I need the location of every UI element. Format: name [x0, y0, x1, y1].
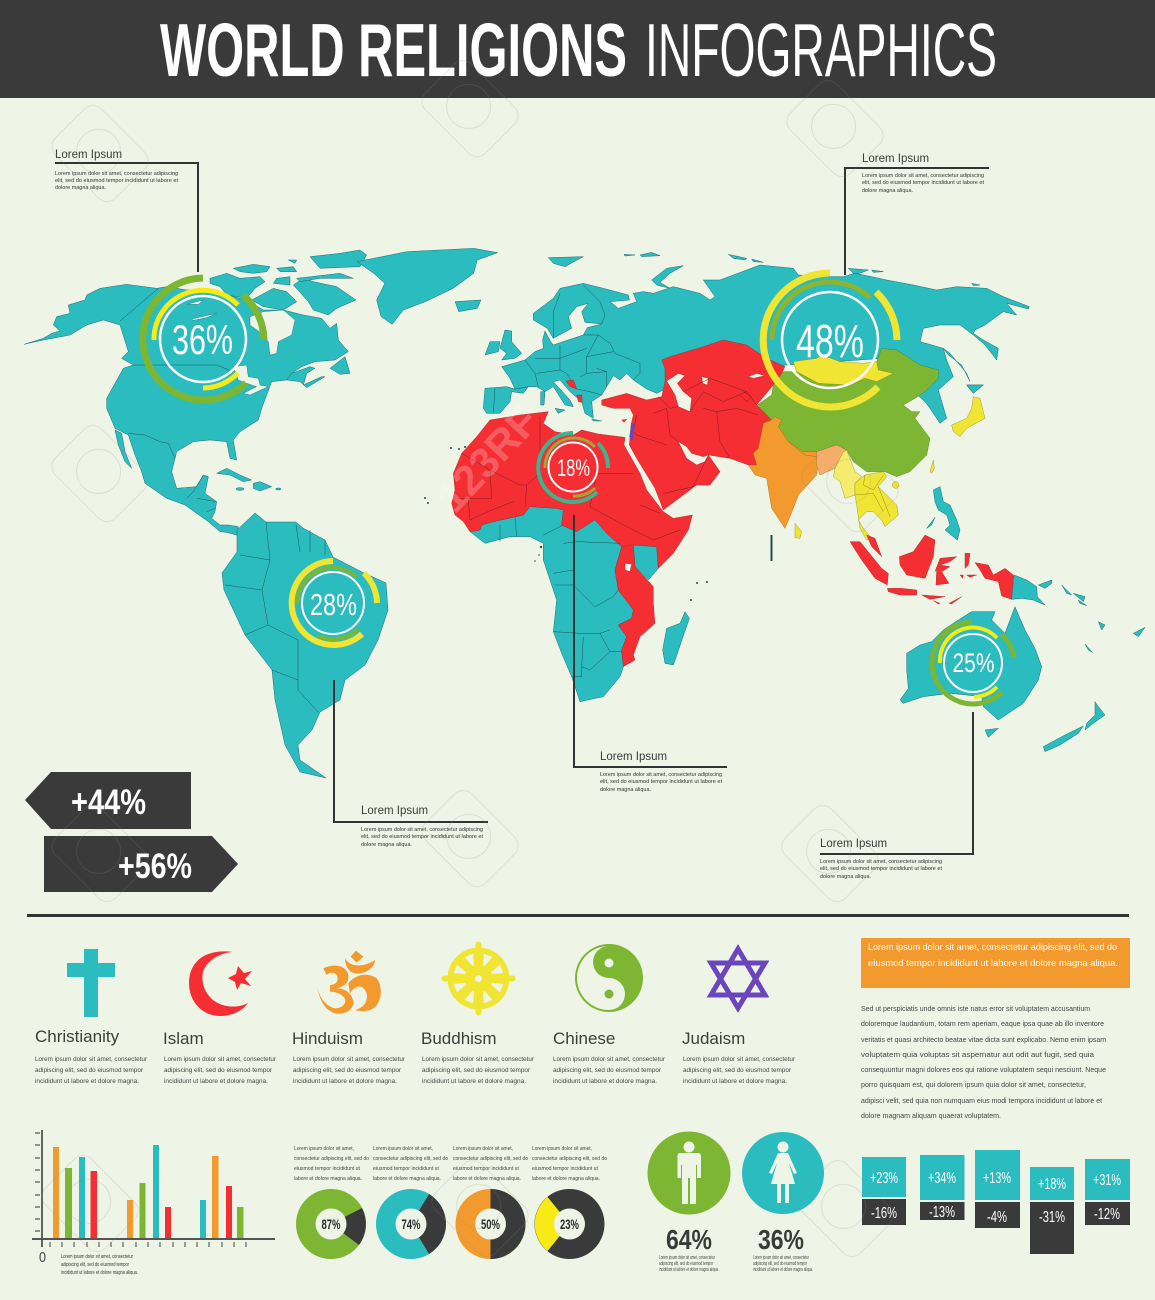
religion: christianity: adipiscing elit, sed do eiusmod tempor	[35, 1067, 144, 1074]
religion: buddhism: Lorem ipsum dolor sit amet, consectetur	[422, 1056, 535, 1063]
religion: judaism: adipiscing elit, sed do eiusmod tempor	[683, 1067, 792, 1074]
religion: christianity: Lorem ipsum dolor sit amet, consectetur	[35, 1056, 148, 1063]
donut chart 50 percent: Lorem ipsum dolor sit amet,	[453, 1146, 513, 1152]
donut chart 23 percent: consectetur adipiscing elit, sed do	[532, 1156, 607, 1162]
religion: islam: adipiscing elit, sed do eiusmod tempor	[164, 1067, 273, 1074]
donut chart 50 percent: 50%	[481, 1216, 500, 1232]
mongolia	[793, 355, 893, 385]
religion: chinese: incididunt ut labore et dolore magna.	[553, 1078, 657, 1085]
female statistic: Lorem ipsum dolor sit amet, consectetur	[753, 1255, 809, 1261]
religion: chinese: Chinese	[553, 1029, 615, 1048]
male statistic	[648, 1132, 730, 1273]
callout: top left: Lorem Ipsum	[55, 149, 122, 161]
religion: judaism: Judaism	[682, 1029, 745, 1048]
icon: man	[678, 1142, 701, 1204]
religion: islam: Islam	[163, 1029, 204, 1048]
callout: top right: dolore magna aliqua.	[862, 188, 913, 194]
donut chart 50 percent	[453, 1146, 528, 1259]
donut chart 50 percent: labore et dolore magna aliqua.	[453, 1176, 521, 1182]
donut chart 23 percent	[532, 1146, 607, 1259]
africa	[452, 412, 692, 702]
up down column 4: -31%	[1039, 1209, 1065, 1226]
female statistic	[742, 1132, 824, 1273]
up down column 2: -13%	[929, 1204, 955, 1221]
religion: judaism	[682, 949, 796, 1085]
arrow: plus 56 percent	[44, 836, 238, 892]
male statistic: 64%	[666, 1224, 712, 1255]
body paragraph: voluptatem quia voluptas sit aspernatur aut odit aut fugit, sed quia	[861, 1050, 1094, 1059]
south america	[222, 513, 388, 778]
body paragraph	[861, 1004, 1106, 1120]
up down column 1	[862, 1157, 906, 1225]
header banner	[0, 0, 1155, 98]
donut callout 36 percent	[143, 278, 264, 400]
male statistic: adipiscing elit, sed do eiusmod tempor	[659, 1261, 713, 1267]
donut chart 74 percent: eiusmod tempor incididunt ut	[373, 1166, 440, 1172]
religion: chinese: Lorem ipsum dolor sit amet, consectetur	[553, 1056, 666, 1063]
body paragraph: porro quisquam est, qui dolorem ipsum quia dolor sit amet, consectetur,	[861, 1080, 1086, 1089]
icon: dharma wheel	[444, 944, 512, 1012]
callout: south america	[334, 680, 488, 848]
donut chart 74 percent: Lorem ipsum dolor sit amet,	[373, 1146, 433, 1152]
callout: top left: Lorem ipsum dolor sit amet, consectetur adipiscing	[55, 171, 178, 177]
up down column 5: +31%	[1093, 1172, 1121, 1189]
religion: hinduism	[292, 951, 406, 1085]
eurasia and british isles	[483, 252, 1029, 510]
callout: top left: dolore magna aliqua.	[55, 185, 106, 191]
donut chart 87 percent	[294, 1146, 369, 1259]
female statistic: 36%	[758, 1224, 804, 1255]
body paragraph: adipisci velit, sed quia non numquam eius modi tempora incididunt ut labore et	[861, 1096, 1102, 1105]
arrow: plus 44 percent	[25, 772, 191, 829]
male statistic: incididunt ut labore et dolore magna aliqua.	[659, 1267, 719, 1273]
callout: south america: elit, sed do eiusmod tempor incididunt ut labore et	[361, 834, 483, 840]
india	[748, 417, 818, 528]
religion: buddhism: incididunt ut labore et dolore magna.	[422, 1078, 526, 1085]
orange text banner	[861, 938, 1130, 988]
donut chart 87 percent: labore et dolore magna aliqua.	[294, 1176, 362, 1182]
donut chart 74 percent	[373, 1146, 448, 1259]
icon: woman	[769, 1142, 797, 1203]
up down column 3	[975, 1150, 1020, 1228]
donut chart 23 percent: Lorem ipsum dolor sit amet,	[532, 1146, 592, 1152]
up down column 1: -16%	[871, 1205, 897, 1222]
callout: top right: Lorem Ipsum	[862, 153, 929, 165]
religion: buddhism	[421, 944, 535, 1085]
callout: south america: Lorem Ipsum	[361, 805, 428, 817]
donut chart 23 percent: labore et dolore magna aliqua.	[532, 1176, 600, 1182]
female statistic: adipiscing elit, sed do eiusmod tempor	[753, 1261, 807, 1267]
up down column 2: +34%	[928, 1170, 956, 1187]
body paragraph: doloremque laudantium, totam rem aperiam, eaque ipsa quae ab illo inventore	[861, 1019, 1104, 1028]
greenland and iceland	[357, 248, 498, 324]
callout: africa: Lorem ipsum dolor sit amet, consectetur adipiscing	[600, 772, 722, 778]
orange text banner: eiusmod tempor incididunt ut labore et dolore magna aliqua.	[868, 958, 1118, 968]
up down column 4: +18%	[1038, 1176, 1066, 1193]
up down column 4	[1030, 1167, 1074, 1254]
world map	[24, 248, 1145, 778]
donut chart 74 percent: consectetur adipiscing elit, sed do	[373, 1156, 448, 1162]
up down column 2	[920, 1155, 964, 1221]
callout: top left	[55, 149, 198, 272]
callout: australia: Lorem Ipsum	[820, 838, 887, 850]
up down column 5	[1085, 1159, 1130, 1225]
donut chart 50 percent: consectetur adipiscing elit, sed do	[453, 1156, 528, 1162]
callout: australia: elit, sed do eiusmod tempor incididunt ut labore et	[820, 866, 942, 872]
religion: judaism: incididunt ut labore et dolore magna.	[683, 1078, 787, 1085]
donut chart 87 percent: eiusmod tempor incididunt ut	[294, 1166, 361, 1172]
religion: chinese	[553, 944, 666, 1085]
callout: top right: Lorem ipsum dolor sit amet, consectetur adipiscing	[862, 173, 984, 179]
donut callout 48 percent: 48%	[796, 315, 864, 367]
up down column 3: -4%	[987, 1209, 1007, 1226]
orange text banner: Lorem ipsum dolor sit amet, consectetur adipiscing elit, sed do	[868, 942, 1117, 952]
callout: top right	[845, 153, 989, 275]
donut chart 87 percent: 87%	[322, 1216, 341, 1232]
donut chart 87 percent: consectetur adipiscing elit, sed do	[294, 1156, 369, 1162]
callout: top left: elit, sed do eiusmod tempor incididunt ut labore et	[55, 178, 178, 184]
callout: africa	[574, 515, 727, 793]
donut chart 23 percent: eiusmod tempor incididunt ut	[532, 1166, 599, 1172]
callout: australia: dolore magna aliqua.	[820, 874, 871, 880]
donut chart 74 percent: 74%	[402, 1216, 421, 1232]
donut callout 36 percent: 36%	[172, 316, 233, 363]
icon: cross	[67, 949, 115, 1017]
body paragraph: veritatis et quasi architecto beatae vitae dicta sunt explicabo. Nemo enim ipsam	[861, 1035, 1106, 1044]
religion: buddhism: adipiscing elit, sed do eiusmod tempor	[422, 1067, 531, 1074]
body paragraph: dolore magnam aliquam quaerat voluptatem.	[861, 1111, 1001, 1120]
up down column 3: +13%	[983, 1170, 1011, 1187]
callout: south america: dolore magna aliqua.	[361, 842, 412, 848]
religion: hinduism: Lorem ipsum dolor sit amet, consectetur	[293, 1056, 406, 1063]
donut callout 25 percent	[932, 622, 1014, 704]
religion: hinduism: incididunt ut labore et dolore magna.	[293, 1078, 397, 1085]
text: 123RF	[427, 397, 548, 521]
donut callout 25 percent: 25%	[952, 648, 994, 678]
donut chart 87 percent: Lorem ipsum dolor sit amet,	[294, 1146, 354, 1152]
donut callout 18 percent: 18%	[557, 455, 590, 482]
icon: yin yang	[575, 944, 643, 1012]
callout: australia: Lorem ipsum dolor sit amet, consectetur adipiscing	[820, 859, 942, 865]
religion: christianity: incididunt ut labore et dolore magna.	[35, 1078, 139, 1085]
callout: south america: Lorem ipsum dolor sit amet, consectetur adipiscing	[361, 827, 483, 833]
callout: africa: Lorem Ipsum	[600, 751, 667, 763]
north america	[24, 250, 367, 535]
indonesia, oceania and australia	[850, 487, 1145, 752]
donut chart 50 percent: eiusmod tempor incididunt ut	[453, 1166, 520, 1172]
arrow: plus 56 percent: +56%	[118, 847, 192, 886]
bar chart	[32, 1130, 275, 1276]
religion: hinduism: adipiscing elit, sed do eiusmod tempor	[293, 1067, 402, 1074]
male statistic: Lorem ipsum dolor sit amet, consectetur	[659, 1255, 715, 1261]
religion: hinduism: Hinduism	[292, 1029, 363, 1048]
south and east asia	[748, 348, 985, 540]
bar chart: Lorem ipsum dolor sit amet, consectetur	[61, 1254, 133, 1260]
bar chart: 0	[39, 1249, 46, 1266]
religion: judaism: Lorem ipsum dolor sit amet, consectetur	[683, 1056, 796, 1063]
donut callout 28 percent: 28%	[310, 587, 357, 622]
religion: christianity	[35, 949, 148, 1085]
icon: om	[317, 951, 381, 1014]
callout: top right: elit, sed do eiusmod tempor incididunt ut labore et	[862, 180, 984, 186]
icon: star of david	[711, 949, 765, 1008]
header banner: WORLD RELIGIONS	[160, 8, 627, 92]
religion: islam: Lorem ipsum dolor sit amet, consectetur	[164, 1056, 277, 1063]
body paragraph: Sed ut perspiciatis unde omnis iste natus error sit voluptatem accusantium	[861, 1004, 1090, 1013]
donut chart 23 percent: 23%	[560, 1216, 579, 1232]
callout: africa: elit, sed do eiusmod tempor incididunt ut labore et	[600, 779, 722, 785]
icon: crescent and star	[189, 951, 252, 1016]
middle east and central asia	[602, 340, 785, 510]
callout: australia	[820, 712, 973, 880]
donut callout 48 percent	[763, 273, 897, 407]
up down column 5: -12%	[1094, 1206, 1120, 1223]
bar chart: incididunt ut labore et dolore magna aliqua.	[61, 1270, 138, 1276]
donut callout 28 percent	[292, 561, 377, 645]
religion: islam: incididunt ut labore et dolore magna.	[164, 1078, 268, 1085]
female statistic: incididunt ut labore et dolore magna aliqua.	[753, 1267, 813, 1273]
religion: chinese: adipiscing elit, sed do eiusmod tempor	[553, 1067, 662, 1074]
religion: buddhism: Buddhism	[421, 1029, 497, 1048]
bar chart: adipiscing elit, sed do eiusmod tempor	[61, 1262, 129, 1268]
southeast asia	[833, 450, 898, 540]
arrow: plus 44 percent: +44%	[71, 783, 146, 822]
donut chart 74 percent: labore et dolore magna aliqua.	[373, 1176, 441, 1182]
up down column 1: +23%	[870, 1170, 898, 1187]
china	[757, 348, 938, 477]
religion: islam	[163, 951, 277, 1085]
body paragraph: consequuntur magni dolores eos qui ratione voluptatem sequi nesciunt. Neque	[861, 1065, 1106, 1074]
donut callout 18 percent	[538, 433, 608, 502]
callout: africa: dolore magna aliqua.	[600, 787, 651, 793]
religion: christianity: Christianity	[35, 1027, 120, 1046]
